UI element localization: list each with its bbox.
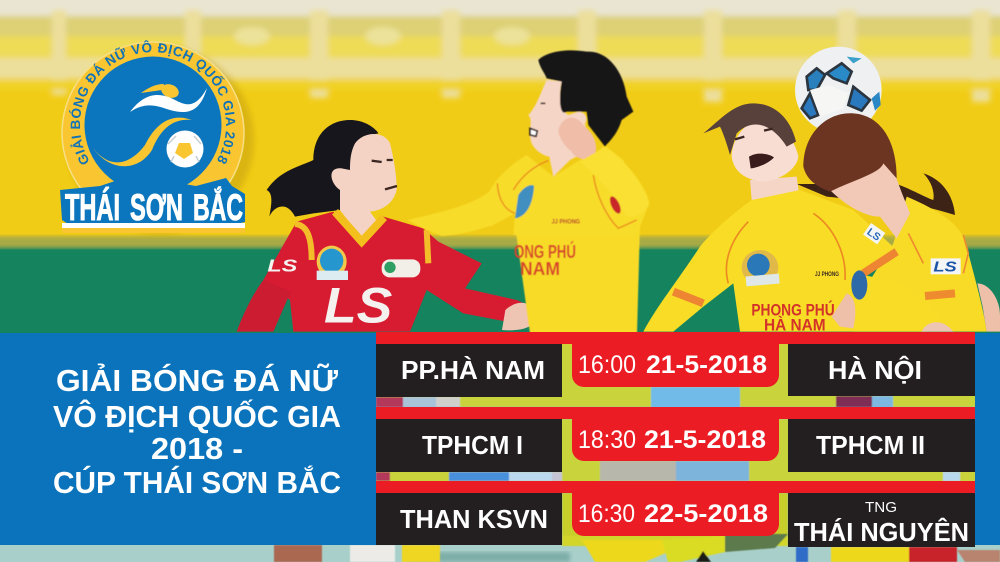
match date: 22-5-2018 xyxy=(644,500,768,528)
time pill xyxy=(572,344,779,387)
raised sleeve xyxy=(580,147,649,217)
LS chest logo: LS xyxy=(324,278,392,334)
word SƠN: SƠN xyxy=(130,187,183,228)
time pill xyxy=(572,419,779,461)
adidas stripes xyxy=(696,551,711,562)
neck xyxy=(750,177,800,210)
chest badge xyxy=(742,250,780,286)
blue right strip xyxy=(975,333,1000,545)
heading line 2: VÔ ĐỊCH QUỐC GIA xyxy=(53,398,341,434)
match date: 21-5-2018 xyxy=(646,351,767,379)
blue disc xyxy=(84,56,222,194)
chest badge xyxy=(515,185,534,218)
away team box xyxy=(788,344,975,396)
tournament logo: GIẢI BÓNG ĐÁ NỮ VÔ ĐỊCH QUỐC GIA 2018 xyxy=(69,40,236,164)
bottom strip legs xyxy=(274,534,1000,562)
jersey name line 1: PHONG PHÚ xyxy=(751,300,835,319)
sleeve badge xyxy=(608,195,623,215)
panel heading xyxy=(53,362,341,500)
swimmer head xyxy=(159,82,181,100)
kick-off time: 18:30 xyxy=(578,426,636,454)
hand xyxy=(832,293,855,328)
hand xyxy=(502,303,536,330)
sponsor mark: JJ PHONG xyxy=(815,272,839,278)
away team box xyxy=(788,419,975,472)
home team box xyxy=(376,419,562,472)
logo shadow xyxy=(66,46,254,234)
center sock xyxy=(662,536,725,562)
heading line 1: GIẢI BÓNG ĐÁ NỮ xyxy=(56,362,338,398)
name banner shape xyxy=(60,178,245,224)
face and neck xyxy=(331,134,397,238)
away team name: TPHCM II xyxy=(816,430,925,460)
shoulder trim xyxy=(295,224,428,263)
raised fist xyxy=(558,118,596,159)
away team small label: TNG xyxy=(865,499,897,516)
red jersey underneath xyxy=(853,303,873,330)
face xyxy=(528,80,590,177)
LS sleeve logo: LS xyxy=(267,255,298,275)
sponsor mark: JJ PHONG xyxy=(552,218,580,225)
home team box xyxy=(376,344,562,397)
curved tournament name xyxy=(80,52,226,162)
jersey name line 1: ONG PHÚ xyxy=(514,241,576,262)
lower body slices behind fixtures xyxy=(376,344,988,546)
orange trim and LS patch xyxy=(908,233,968,296)
yellow jersey upper xyxy=(490,147,647,235)
fixture 2 xyxy=(376,407,975,472)
orange arm bands xyxy=(673,252,897,303)
yellow ring xyxy=(62,42,244,224)
blue stand post xyxy=(796,547,808,562)
home team box xyxy=(376,493,562,545)
red bar xyxy=(376,332,975,344)
hair xyxy=(703,103,796,155)
yellow jersey xyxy=(643,190,942,332)
face xyxy=(830,162,910,238)
mouth xyxy=(749,154,774,168)
blue left panel xyxy=(0,333,376,545)
sponsor patch xyxy=(382,259,420,277)
red bar xyxy=(376,481,975,493)
sleeve LS patch xyxy=(863,223,885,245)
yellow jersey lower xyxy=(515,225,640,333)
right leg xyxy=(831,547,909,562)
word THÁI: THÁI xyxy=(65,187,120,228)
heading line 3: 2018 - xyxy=(151,431,243,466)
heading line 4: CÚP THÁI SƠN BẮC xyxy=(53,464,341,500)
left leg xyxy=(274,545,322,562)
face xyxy=(732,119,798,182)
time pill xyxy=(572,493,779,536)
banner words xyxy=(65,186,243,228)
home team name: THAN KSVN xyxy=(400,504,548,534)
orange trim and LS patch: LS xyxy=(933,260,957,276)
center leg xyxy=(582,540,668,562)
eye and mouth xyxy=(530,103,545,136)
fixture 1 xyxy=(376,332,975,397)
tournament badge xyxy=(317,246,348,280)
white swoosh xyxy=(130,88,207,112)
player in red jersey xyxy=(237,120,536,334)
banner white stripe xyxy=(62,223,245,228)
ponytail xyxy=(797,173,955,215)
jersey name line 2: HÀ NAM xyxy=(764,316,826,335)
heading player looking up xyxy=(643,103,953,335)
eyes and mouth xyxy=(372,160,397,189)
away team name: THÁI NGUYÊN xyxy=(794,517,969,547)
second player badge xyxy=(851,270,867,300)
jersey name line 2: NAM xyxy=(520,259,560,279)
swimmer hair xyxy=(141,84,164,93)
red jersey xyxy=(263,212,535,332)
right hands xyxy=(977,283,1000,332)
fixture 3 xyxy=(376,481,975,547)
player in yellow raising arm xyxy=(408,50,649,333)
word BẮC: BẮC xyxy=(193,186,243,228)
football xyxy=(795,47,882,133)
collar trim xyxy=(335,212,384,242)
red sock xyxy=(909,547,957,562)
home team name: TPHCM I xyxy=(422,430,523,460)
orange seams xyxy=(497,161,637,228)
hair xyxy=(538,50,633,147)
yellow swoosh xyxy=(93,118,192,166)
left shoe xyxy=(350,545,395,562)
home team name: PP.HÀ NAM xyxy=(401,355,545,385)
left sleeve xyxy=(237,280,291,332)
match date: 21-5-2018 xyxy=(644,426,766,454)
away team box xyxy=(788,493,975,547)
right skin xyxy=(957,550,1000,562)
kick-off time: 16:30 xyxy=(578,500,635,528)
hair xyxy=(803,113,897,192)
yellow sock xyxy=(402,545,440,562)
eyes xyxy=(735,129,773,139)
ponytail and hair xyxy=(267,120,378,217)
hand on sleeve end xyxy=(922,322,953,332)
logo football xyxy=(166,130,204,168)
orange seams xyxy=(726,213,845,283)
green boot xyxy=(725,534,788,552)
kick-off time: 16:00 xyxy=(578,351,636,379)
heading player with bright ponytail xyxy=(797,113,1000,332)
tournament logo xyxy=(60,40,255,234)
sleeve LS patch: LS xyxy=(865,226,883,244)
yellow jersey xyxy=(853,197,987,332)
outstretched arm xyxy=(408,184,515,236)
banner yellow edge xyxy=(62,228,245,233)
away team name: HÀ NỘI xyxy=(828,355,922,385)
red bar xyxy=(376,407,975,419)
